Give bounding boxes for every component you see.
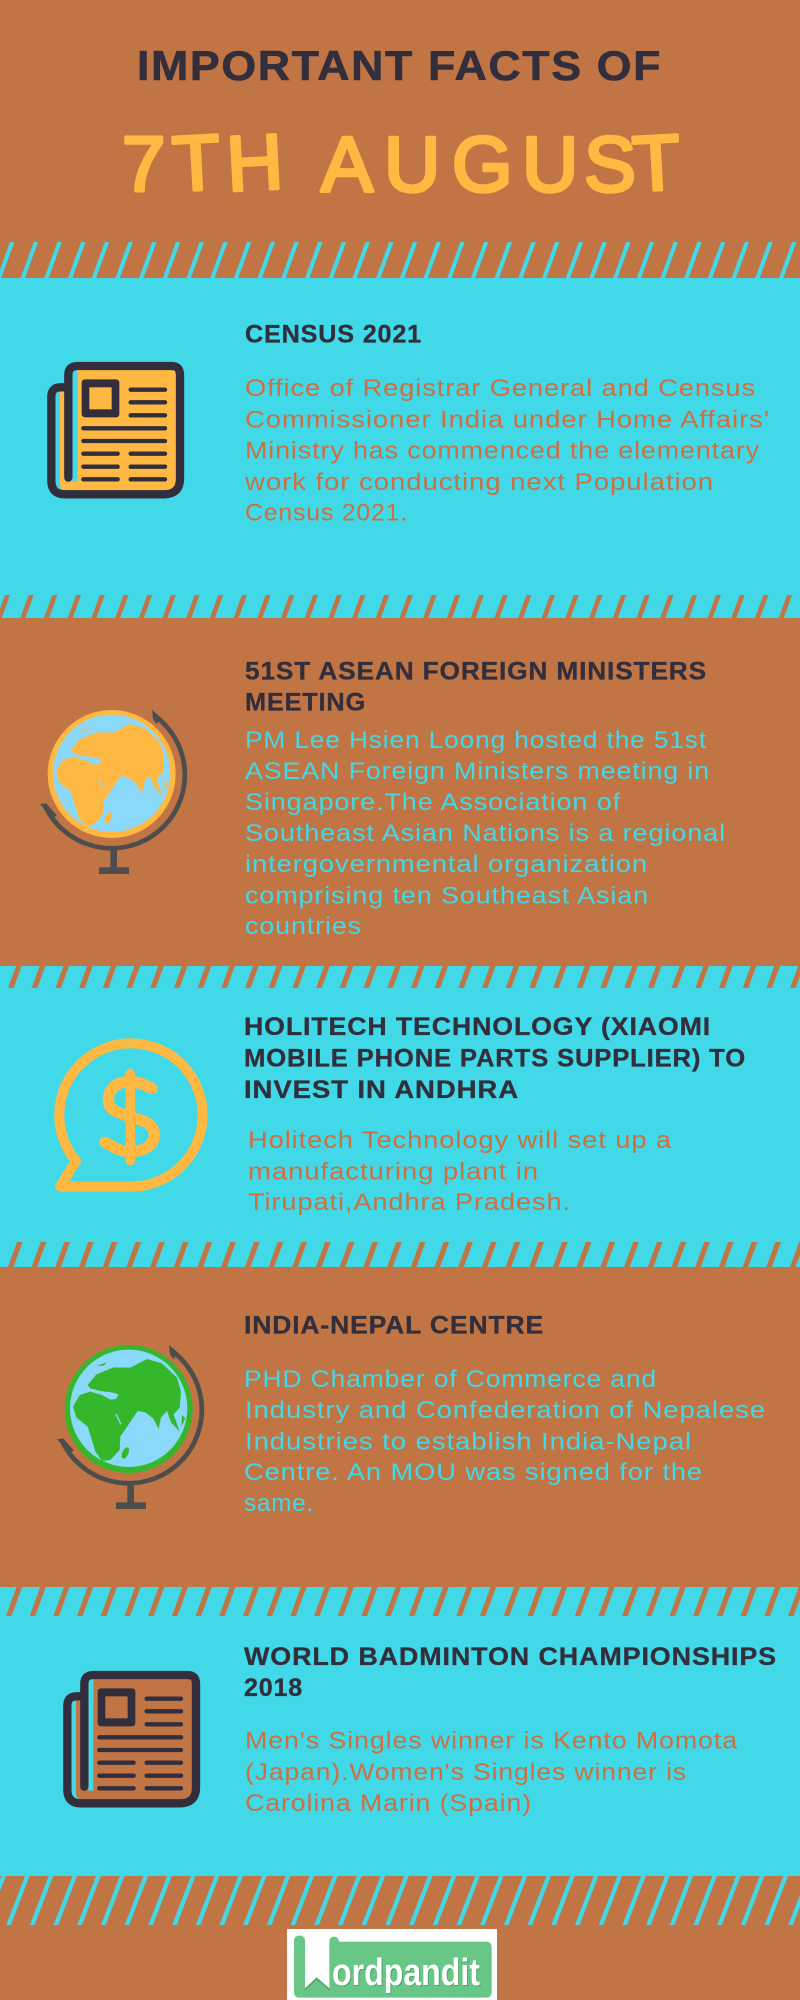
heading: world badminton championships 2018: WORLD BADMINTON CHAMPIONSHIPS	[244, 1643, 777, 1671]
panel: 51st ASEAN meeting	[40, 658, 726, 940]
text: India-Nepal description: same.	[244, 1490, 314, 1517]
text: India-Nepal description: Industries to establish India-Nepal	[245, 1428, 692, 1456]
title: important facts of: IMPORTANT FACTS OF	[137, 42, 662, 89]
text: India-Nepal description: PHD Chamber of Commerce and	[244, 1366, 657, 1393]
heading: world badminton championships 2018	[244, 1643, 777, 1702]
text: Holitech description: manufacturing plant in	[248, 1158, 539, 1186]
heading: 51st ASEAN foreign ministers meeting: MEETING	[245, 689, 366, 717]
panel: India-Nepal centre	[57, 1312, 766, 1517]
panel: census 2021	[0, 278, 800, 618]
text: ASEAN description: Southeast Asian Nations is a regional	[245, 820, 726, 847]
heading: Holitech	[244, 1013, 746, 1104]
panel: world badminton championships	[0, 1587, 800, 1876]
heading: Holitech: MOBILE PHONE PARTS SUPPLIER) TO	[244, 1044, 746, 1072]
text: ASEAN description: intergovernmental organization	[245, 851, 648, 878]
text: ASEAN description: countries	[245, 913, 362, 940]
text: ASEAN description: Singapore.The Association of	[245, 789, 621, 816]
heading: Holitech: HOLITECH TECHNOLOGY (XIAOMI	[244, 1013, 711, 1041]
icon: globe green	[57, 1345, 202, 1509]
heading: India-Nepal centre: INDIA-NEPAL CENTRE	[244, 1312, 544, 1340]
icon: newspaper yellow	[51, 366, 180, 494]
heading: Holitech: INVEST IN ANDHRA	[244, 1076, 519, 1104]
text: Holitech description: Holitech Technology will set up a	[248, 1127, 672, 1154]
text: ASEAN description: comprising ten Southeast Asian	[245, 882, 649, 910]
text: badminton description: Carolina Marin (Spain)	[245, 1790, 532, 1817]
heading: 51st ASEAN foreign ministers meeting: 51ST ASEAN FOREIGN MINISTERS	[245, 658, 707, 686]
logo: wordpandit: ordpandit	[332, 1952, 480, 1994]
title: 7th August: 7TH AUGUST	[122, 117, 682, 208]
text: India-Nepal description: Industry and Confederation of Nepalese	[245, 1397, 766, 1424]
text: census description: Office of Registrar General and Census	[245, 375, 756, 402]
icon: newspaper brown	[67, 1675, 196, 1803]
heading: census 2021: CENSUS 2021	[245, 320, 422, 348]
icon: globe yellow	[40, 710, 185, 874]
text: census description: work for conducting next Population	[244, 469, 714, 496]
heading: world badminton championships 2018: 2018	[244, 1674, 303, 1702]
text: ASEAN description: PM Lee Hsien Loong hosted the 51st	[245, 727, 707, 754]
icon: dollar speech bubble	[59, 1043, 203, 1187]
text: badminton description	[245, 1728, 738, 1817]
header panel	[122, 42, 682, 208]
text: badminton description: (Japan).Women's Singles winner is	[245, 1759, 687, 1786]
panel: Holitech technology	[0, 966, 800, 1267]
text: India-Nepal description: Centre. An MOU was signed for the	[244, 1459, 703, 1486]
text: census description: Ministry has commenced the elementary	[245, 438, 760, 464]
text: badminton description: Men's Singles winner is Kento Momota	[245, 1728, 738, 1755]
heading: 51st ASEAN foreign ministers meeting	[245, 658, 707, 717]
text: ASEAN description: ASEAN Foreign Ministers meeting in	[245, 758, 710, 785]
text: ASEAN description	[245, 727, 726, 940]
text: India-Nepal description	[244, 1366, 766, 1517]
text: census description	[244, 375, 770, 526]
text: Holitech description	[248, 1127, 672, 1216]
text: census description: Commissioner India under Home Affairs'	[245, 406, 770, 434]
text: census description: Census 2021.	[245, 500, 408, 526]
text: Holitech description: Tirupati,Andhra Pradesh.	[248, 1189, 571, 1216]
logo: wordpandit	[287, 1929, 497, 2000]
